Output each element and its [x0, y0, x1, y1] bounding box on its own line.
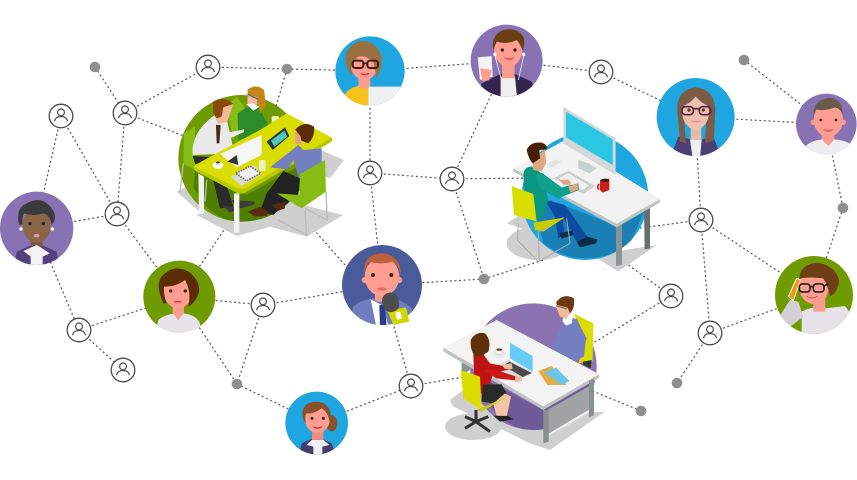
gray network dots [90, 55, 848, 416]
scene: two people at office desk [443, 296, 605, 450]
avatar: man on phone on green [775, 256, 855, 337]
person node icons [49, 55, 722, 398]
avatar: woman on blue, bottom [285, 392, 348, 457]
avatar: man with microphone on navy [342, 245, 422, 328]
avatar: woman on green [143, 261, 215, 335]
dotted network links [36, 60, 843, 423]
avatar: woman on purple, left [0, 192, 73, 272]
scene: team meeting at green table [177, 86, 344, 237]
avatar: woman with laptop on blue [335, 36, 407, 108]
avatar: man with phone and earphones on purple [471, 25, 543, 100]
avatar: man on purple, top right [796, 94, 857, 157]
avatar: woman with long hair on blue [657, 78, 735, 158]
scene: man working at desktop computer [507, 107, 660, 272]
